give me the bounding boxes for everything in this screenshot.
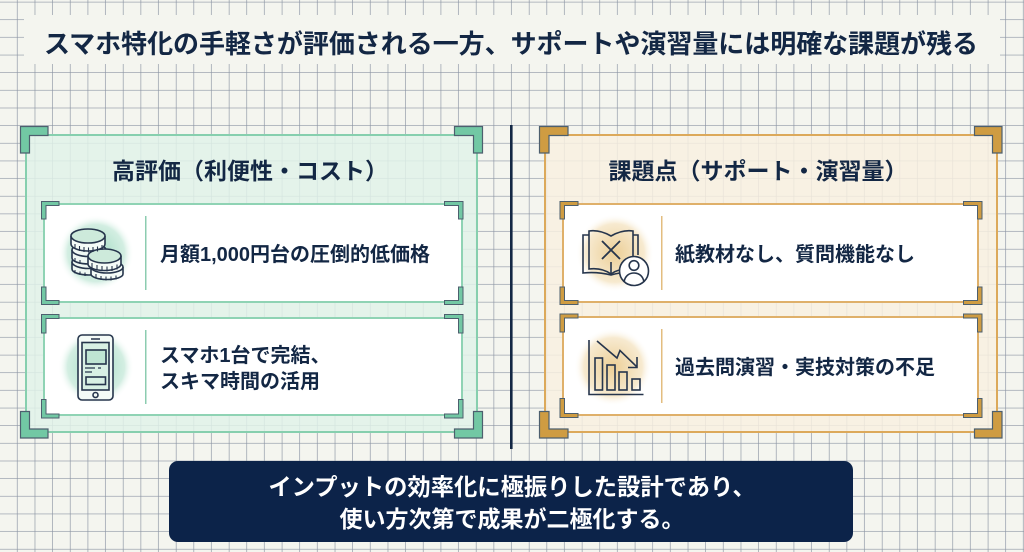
text: smartphone bbox=[160, 344, 331, 393]
card: lacking practice bbox=[560, 314, 982, 418]
callout: conclusion: 使い方次第で成果が二極化する。 bbox=[340, 506, 684, 532]
callout: conclusion bbox=[169, 461, 853, 542]
heading: issues: 課題点（サポート・演習量） bbox=[608, 158, 908, 184]
callout: conclusion: インプットの効率化に極振りした設計であり、 bbox=[268, 474, 756, 500]
divider: card 2 bbox=[145, 330, 146, 404]
title bbox=[24, 15, 1000, 64]
divider: card 3 bbox=[661, 216, 662, 290]
text: lacking practice: 過去問演習・実技対策の不足 bbox=[675, 356, 935, 379]
divider: card 1 bbox=[145, 216, 146, 290]
text: smartphone: スキマ時間の活用 bbox=[160, 370, 320, 393]
text: no textbook: 紙教材なし、質問機能なし bbox=[675, 243, 915, 266]
icon: coins bbox=[58, 215, 134, 291]
text: low price: 月額1,000円台の圧倒的低価格 bbox=[160, 243, 430, 266]
heading: high ratings: 高評価（利便性・コスト） bbox=[112, 158, 388, 184]
panel: high ratings bbox=[20, 126, 482, 438]
card: low price bbox=[42, 202, 463, 304]
panel: issues bbox=[540, 126, 1002, 438]
text: smartphone: スマホ1台で完結、 bbox=[160, 344, 331, 367]
divider: card 4 bbox=[661, 329, 662, 403]
icon: smartphone bbox=[58, 329, 134, 405]
icon: book with X and person bbox=[576, 214, 654, 292]
card: smartphone bbox=[42, 314, 463, 418]
center divider bbox=[510, 125, 513, 449]
icon: declining bar chart bbox=[574, 328, 652, 406]
title: スマホ特化の手軽さが評価される一方、サポートや演習量には明確な課題が残る bbox=[44, 29, 978, 59]
card: no textbook bbox=[560, 202, 982, 304]
